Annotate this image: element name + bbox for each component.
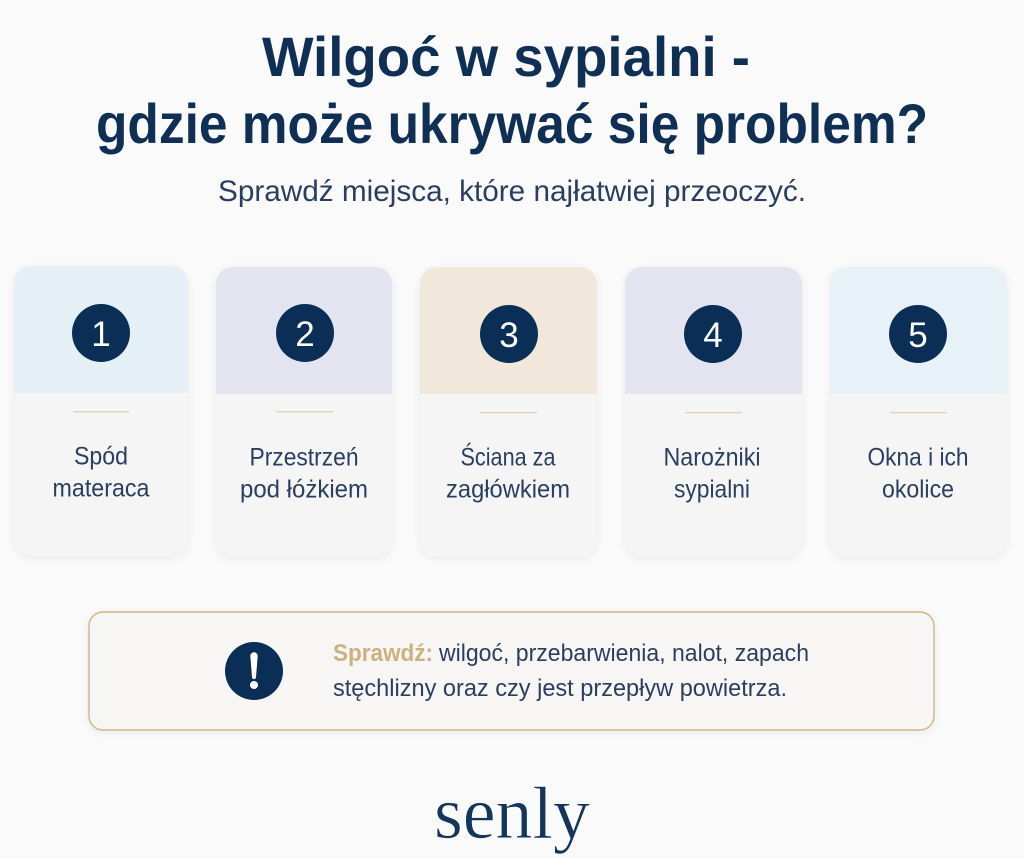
number badge 1: 1: [91, 315, 111, 354]
callout text: wilgoć, przebarwienia, nalot, zapach: [438, 640, 809, 667]
logo: senly: [434, 773, 590, 855]
title: gdzie może ukrywać się problem?: [96, 92, 928, 155]
subtitle: Sprawdź miejsca, które najłatwiej przeoczyć.: [218, 175, 806, 208]
panel: card 4: [625, 267, 802, 557]
card 3 label: zagłówkiem: [446, 476, 570, 504]
card 2 label: [240, 444, 368, 504]
card 2 header: [216, 267, 392, 394]
number badge 5: 5: [908, 316, 928, 355]
number badge 3: [480, 305, 538, 363]
card 2 label: pod łóżkiem: [240, 476, 368, 504]
card 3 label: Ściana za: [460, 442, 556, 472]
card 4 label: [664, 444, 760, 504]
icon: exclamation mark: [225, 642, 283, 700]
panel: card 1: [14, 266, 188, 556]
number badge 1: [72, 304, 130, 362]
callout text: stęchlizny oraz czy jest przepływ powietrza.: [333, 675, 787, 702]
panel: card 5: [830, 267, 1007, 557]
card 5 header: [830, 267, 1007, 394]
panel: card 2: [216, 267, 392, 557]
card 1 label: materaca: [52, 474, 150, 502]
card 5 label: Okna i ich: [868, 444, 968, 472]
card 3 label: [446, 442, 570, 504]
title: Wilgoć w sypialni -: [262, 25, 750, 88]
number badge 5: [889, 305, 947, 363]
callout text: [333, 640, 809, 702]
card 4 label: Narożniki: [664, 444, 760, 472]
card 3 header: [420, 267, 597, 394]
card 5 label: okolice: [882, 476, 954, 504]
card 1 label: Spód: [74, 442, 128, 470]
number badge 3: 3: [499, 316, 519, 355]
number badge 4: 4: [703, 316, 723, 355]
callout: [89, 612, 934, 730]
number badge 2: 2: [295, 315, 315, 354]
number badge 2: [276, 304, 334, 362]
card 4 header: [625, 267, 802, 394]
card 1 header: [14, 266, 188, 393]
title: [96, 25, 928, 155]
callout text: Sprawdź:: [333, 640, 433, 667]
card 4 label: sypialni: [674, 476, 750, 504]
number badge 4: [684, 305, 742, 363]
panel: card 3: [420, 267, 597, 557]
card 5 label: [868, 444, 968, 504]
card 1 label: [52, 442, 150, 502]
card 2 label: Przestrzeń: [250, 444, 358, 472]
